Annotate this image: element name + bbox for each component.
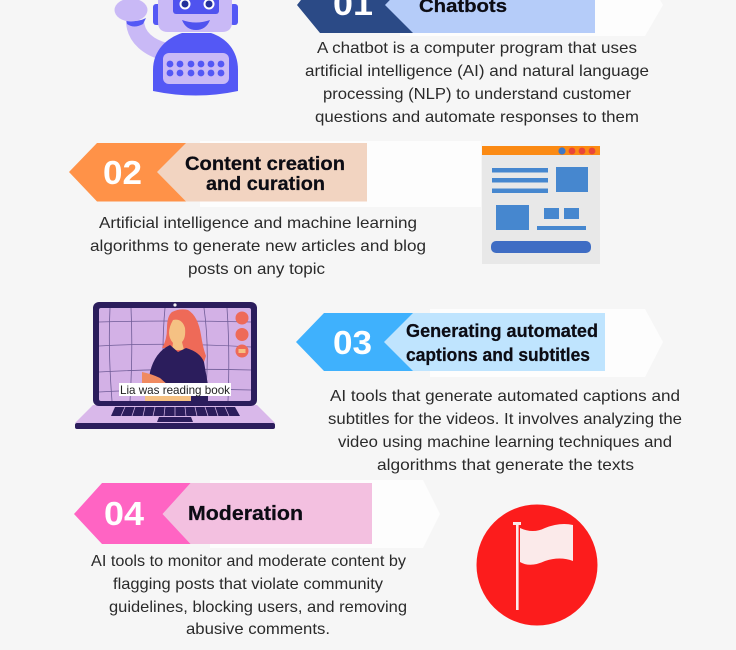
text: moderation description: AI tools to monitor and moderate content by: [91, 553, 406, 570]
banner 02: Content creation and curation: 02: [103, 154, 142, 191]
text: chatbots description: [305, 40, 649, 126]
text: captions description: AI tools that generate automated captions and: [330, 388, 680, 405]
text: content creation description: Artificial intelligence and machine learning: [99, 215, 417, 232]
text: moderation description: abusive comments.: [186, 621, 330, 638]
text: moderation description: [91, 553, 407, 638]
icon: robot: [114, 0, 238, 96]
text: moderation description: guidelines, blocking users, and removing: [109, 599, 407, 616]
text: content creation description: algorithms to generate new articles and blog: [90, 238, 426, 255]
banner 02: Content creation and curation: Content creation: [185, 154, 345, 175]
icon: laptop with captioned video: [75, 302, 275, 429]
text: chatbots description: questions and automate responses to them: [315, 109, 639, 126]
banner 01: Chatbots: [297, 0, 663, 36]
banner 03: Generating automated captions and subtitles: captions and subtitles: [406, 345, 590, 365]
icon: website layout: [482, 146, 600, 264]
banner 03: Generating automated captions and subtitles: [296, 309, 663, 377]
text: chatbots description: processing (NLP) to understand customer: [323, 86, 632, 103]
text: captions description: video using machine learning techniques and: [338, 434, 672, 451]
banner 04: Moderation: [74, 480, 440, 548]
text: chatbots description: artificial intelligence (AI) and natural language: [305, 63, 649, 80]
banner 04: Moderation: Moderation: [188, 503, 303, 525]
banner 02: Content creation and curation: and curation: [206, 174, 325, 195]
text: chatbots description: A chatbot is a computer program that uses: [317, 40, 637, 57]
banner 03: Generating automated captions and subtitles: 03: [333, 324, 372, 361]
text: captions description: [328, 388, 682, 474]
banner 04: Moderation: 04: [104, 495, 145, 532]
text: captions description: subtitles for the videos. It involves analyzing the: [328, 411, 682, 428]
text: captions description: algorithms that generate the texts: [377, 457, 634, 474]
icon: red flag: [476, 504, 598, 626]
text: content creation description: posts on any topic: [188, 261, 325, 278]
text: content creation description: [90, 215, 426, 278]
icon: laptop with captioned video: Lia was reading book: [120, 383, 231, 397]
text: moderation description: flagging posts that violate community: [113, 576, 383, 593]
banner 03: Generating automated captions and subtitles: Generating automated: [406, 321, 598, 341]
banner 02: Content creation and curation: [69, 141, 481, 207]
